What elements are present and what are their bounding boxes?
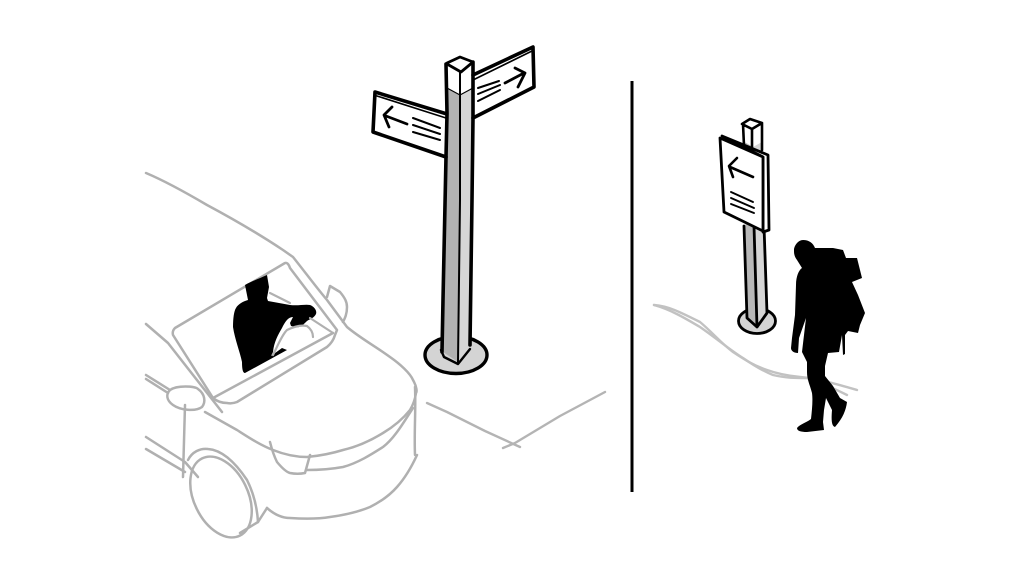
sign text lines <box>731 192 754 213</box>
left arrow <box>384 107 407 127</box>
car outline <box>146 173 417 547</box>
signpost: single <box>720 119 776 334</box>
post cap linework <box>742 119 762 150</box>
right arrow <box>505 68 525 87</box>
post top cap <box>742 119 762 147</box>
windshield <box>173 263 337 403</box>
vertical divider <box>630 81 634 492</box>
trail lines <box>654 305 857 395</box>
left sign panel <box>373 92 447 157</box>
hiker silhouette <box>791 240 865 432</box>
post top cap <box>447 57 473 95</box>
bumper <box>267 455 417 519</box>
road edge lines <box>427 392 605 448</box>
wheel <box>178 447 264 547</box>
left pillar <box>146 324 222 412</box>
left arrow <box>729 158 753 177</box>
door lines <box>146 375 170 390</box>
grille <box>270 442 310 474</box>
sign panel <box>720 136 769 232</box>
post right face <box>458 88 473 362</box>
right sign panel <box>473 47 534 118</box>
car body <box>146 173 417 457</box>
left mirror <box>167 386 204 410</box>
right mirror <box>327 286 347 322</box>
post faces <box>744 142 757 327</box>
signpost: two-way <box>373 47 534 374</box>
steering and seat lines <box>270 293 333 355</box>
post linework <box>441 57 473 364</box>
wheel arch <box>188 449 258 533</box>
post left face <box>443 88 460 362</box>
sign text lines <box>478 81 500 101</box>
driver silhouette <box>233 275 316 373</box>
post base <box>738 308 776 334</box>
sign text lines <box>413 118 440 140</box>
post base <box>425 336 487 374</box>
post linework <box>744 226 767 327</box>
